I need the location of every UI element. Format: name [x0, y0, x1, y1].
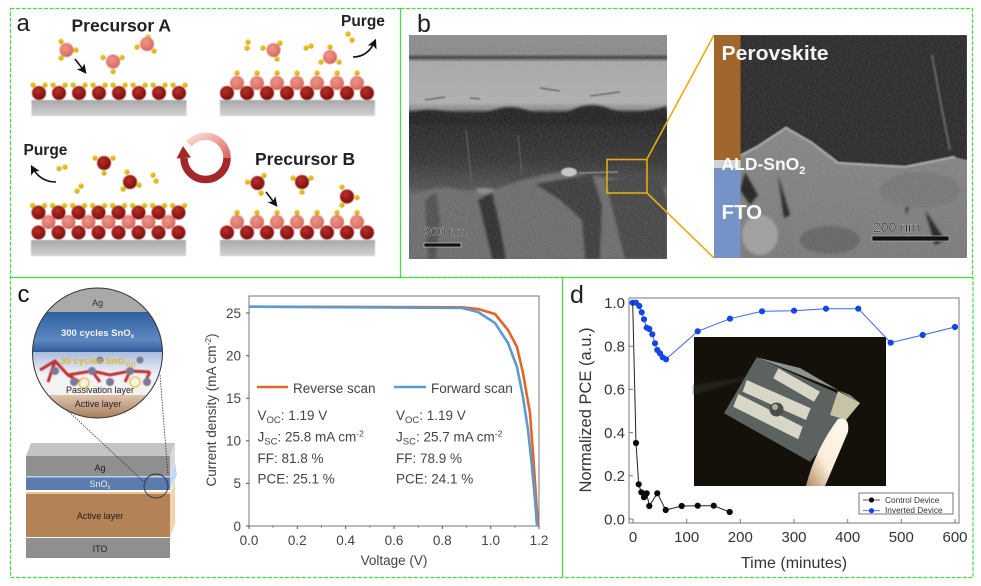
x axis title: Voltage (V)	[361, 553, 427, 568]
arrow: purge left	[32, 167, 56, 182]
x tick labels: 0.2	[288, 533, 307, 548]
x tick labels: 0	[629, 529, 637, 546]
label: ALD-SnO2: 2	[799, 165, 805, 177]
legend: reverse scan	[257, 381, 376, 396]
zoom box on SEM image	[607, 160, 647, 193]
heading: Precursor B: Precursor B	[255, 149, 355, 169]
legend: reverse scan: Reverse scan	[293, 381, 376, 396]
forward scan parameters: J	[396, 430, 403, 444]
blue forward scan curve	[249, 307, 537, 526]
y tick labels: 20	[226, 348, 241, 364]
y tick labels	[226, 306, 241, 534]
scale bar left: 200 nm	[424, 224, 467, 239]
cycle arrow	[176, 136, 227, 180]
reverse scan parameters: : 25.8 mA cm	[277, 430, 356, 444]
panel letter c: c	[18, 281, 30, 308]
y tick labels: 5	[233, 476, 241, 491]
reverse scan parameters: -2	[356, 428, 364, 438]
y tick labels: 0.8	[604, 338, 625, 356]
legend: Inverted Device	[885, 505, 943, 515]
label: SnOx layer: x	[108, 485, 111, 491]
label: Passivation layer: Passivation layer	[66, 385, 134, 395]
heading: Purge left: Purge	[24, 142, 68, 159]
black control device series	[633, 303, 733, 515]
label: 30 cycles SnOx: x(y)	[125, 362, 136, 368]
step 1 free precursor A molecules	[58, 34, 157, 74]
reverse scan parameters: : 1.19 V	[281, 408, 327, 423]
x tick labels: 1.2	[530, 533, 548, 548]
label: 30 cycles SnOx: 30 cycles SnO	[60, 356, 125, 367]
step 2 by-products	[244, 31, 355, 65]
scale bar left	[424, 224, 467, 247]
panel: device structure and J-V	[10, 278, 562, 578]
y axis title: Normalized PCE (a.u.)	[577, 327, 595, 493]
x tick labels	[240, 533, 548, 548]
x tick labels: 500	[889, 529, 914, 546]
forward scan parameters: V	[396, 408, 405, 423]
y tick labels: 0.2	[604, 468, 625, 485]
forward scan parameters: SC	[403, 436, 416, 448]
y tick labels: 25	[226, 306, 241, 321]
forward scan parameters: OC	[405, 415, 419, 426]
reverse scan parameters	[258, 408, 364, 486]
layer strip: ALD-SnO2	[714, 160, 740, 168]
device stack	[26, 443, 177, 558]
arrow: precursor B descends	[266, 192, 276, 205]
forward scan parameters: : 25.7 mA cm	[416, 430, 495, 444]
x tick labels: 0.0	[240, 533, 258, 548]
reverse scan parameters: J	[258, 430, 264, 444]
label: 300 cycles SnOx: 300 cycles SnO	[61, 328, 131, 339]
forward scan parameters: PCE: 24.1 %	[396, 472, 473, 486]
y tick labels	[604, 295, 625, 528]
SEM image: magnified interface	[740, 35, 967, 258]
zoomed layer circle	[30, 285, 165, 420]
label: ITO: ITO	[93, 544, 107, 554]
scale bar right	[872, 219, 949, 241]
legend: forward scan	[394, 381, 513, 396]
x axis title: Time (minutes)	[741, 555, 847, 572]
y axis title: Current density (mA cm	[204, 346, 219, 487]
panel letter b: b	[417, 10, 431, 38]
arrow: purge top right	[353, 41, 375, 57]
label: 300 cycles SnOx: x	[131, 334, 135, 340]
y axis title: -2	[203, 338, 213, 346]
forward scan parameters	[396, 408, 503, 486]
y tick labels: 10	[226, 434, 241, 448]
x tick labels: 300	[781, 529, 807, 546]
x tick labels: 0.6	[385, 533, 403, 548]
x tick labels: 600	[942, 529, 968, 546]
x tick labels: 0.4	[336, 533, 356, 548]
J-V chart	[203, 296, 548, 568]
panel: stability chart	[562, 278, 973, 578]
reverse scan parameters: SC	[264, 436, 278, 448]
label: Ag: Ag	[92, 298, 103, 308]
x tick labels	[629, 529, 968, 546]
x tick labels: 1.0	[481, 533, 500, 548]
step 3 surface	[30, 203, 187, 256]
step 4 free precursor B molecules	[245, 173, 360, 208]
atoms	[40, 356, 151, 388]
panel letter d: d	[570, 281, 584, 309]
x tick labels: 200	[728, 529, 753, 546]
panel: ALD cycle	[10, 8, 400, 278]
step 4 surface	[220, 210, 375, 256]
label: SnOx layer: SnO	[89, 479, 108, 489]
zoom locator circle and dotted lines	[67, 375, 168, 498]
reverse scan parameters: PCE: 25.1 %	[258, 472, 335, 486]
y tick labels: 15	[226, 391, 241, 406]
forward scan parameters: : 1.19 V	[419, 408, 466, 423]
layer strip: FTO	[714, 168, 740, 258]
legend: forward scan: Forward scan	[431, 381, 513, 396]
step 1 surface: hydroxylated substrate	[30, 82, 188, 116]
plot frame and ticks	[629, 298, 959, 523]
label: Ag layer: Ag	[94, 463, 106, 473]
y tick labels: 0.4	[604, 425, 625, 442]
heading: Precursor A: Precursor A	[72, 16, 171, 36]
y tick labels: 0.0	[604, 512, 625, 528]
label: FTO: FTO	[722, 201, 762, 224]
y tick labels: 1.0	[604, 295, 625, 312]
panel: SEM cross sections	[400, 8, 972, 278]
reverse scan parameters: FF: 81.8 %	[258, 451, 324, 466]
label: ALD-SnO2: ALD-SnO	[722, 154, 799, 174]
inset photo of device	[694, 337, 886, 486]
blue inverted device series	[630, 300, 958, 362]
y tick labels: 0	[233, 519, 241, 534]
arrow: precursor A descends	[75, 59, 85, 72]
heading: Purge top right: Purge	[341, 13, 385, 30]
x tick labels: 0.8	[433, 533, 452, 548]
legend	[859, 493, 953, 515]
legend: Control Device	[885, 495, 940, 505]
y tick labels: 0.6	[604, 382, 625, 398]
reverse scan parameters: V	[258, 408, 267, 423]
SEM image: full cross section	[409, 35, 667, 259]
reverse scan parameters: OC	[267, 415, 281, 426]
label: Perovskite: Perovskite	[722, 42, 828, 65]
forward scan parameters: FF: 78.9 %	[396, 451, 462, 466]
scale bar right: 200 nm	[873, 219, 920, 235]
panel letter a: a	[16, 10, 30, 37]
label: Active layer block: Active layer	[77, 511, 123, 521]
step 3 by-products	[56, 155, 159, 194]
step 2 surface	[220, 70, 375, 116]
orange reverse scan curve	[249, 307, 538, 526]
layer strip: Perovskite	[714, 35, 740, 160]
x tick labels: 400	[835, 529, 860, 546]
x tick labels: 100	[674, 529, 699, 546]
forward scan parameters: -2	[495, 428, 503, 438]
y axis title: )	[204, 333, 219, 338]
zoom connector lines	[647, 35, 714, 258]
label: Active layer: Active layer	[75, 399, 121, 409]
